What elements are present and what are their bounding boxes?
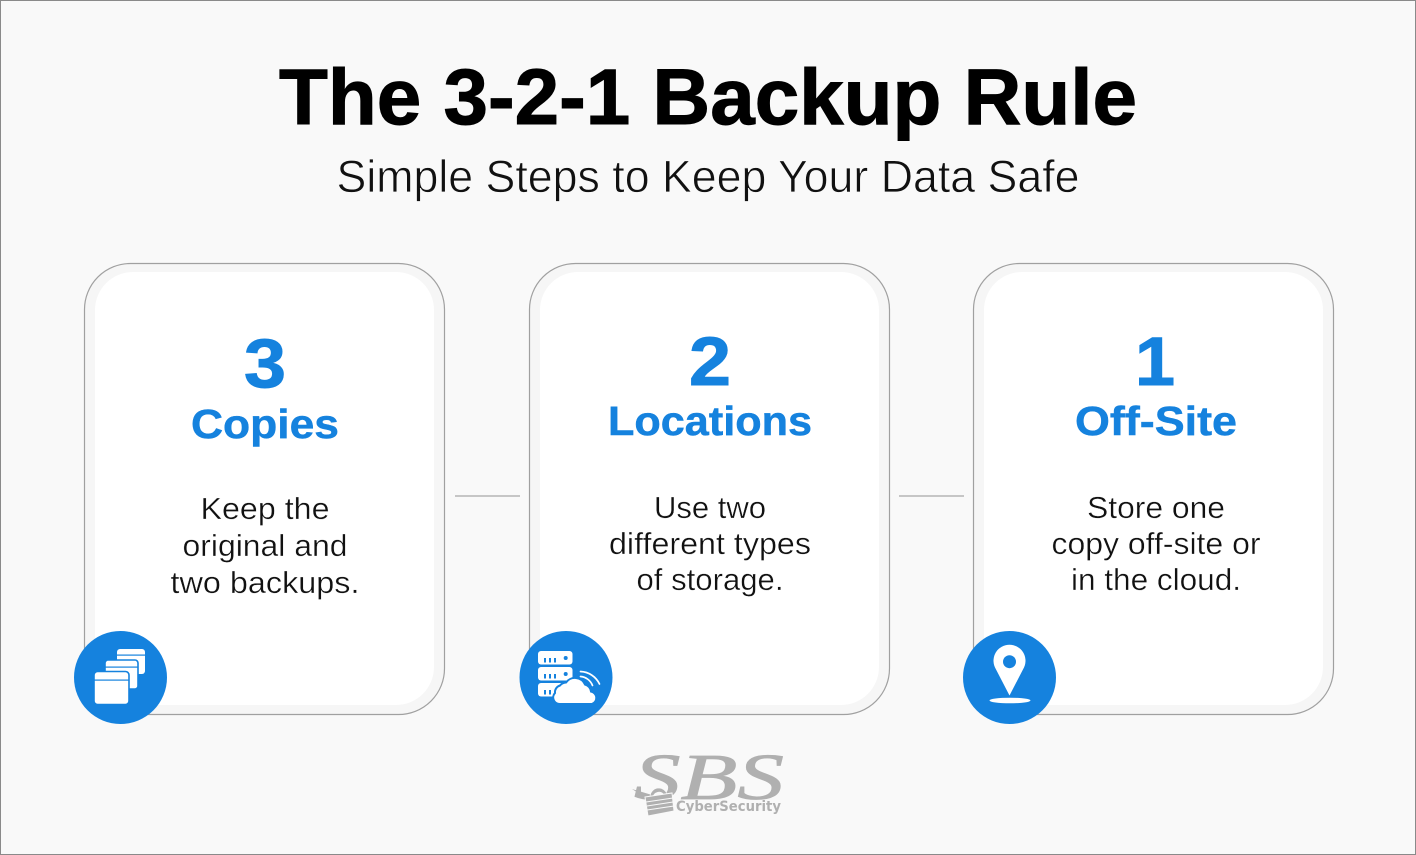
icon: location pin [963,631,1056,724]
logo: SBS CyberSecurity [632,741,784,816]
number 2: 2 [689,323,731,400]
description: copies: Keep the [200,491,330,526]
logo: SBS CyberSecurity: SBS [634,741,784,814]
description: copies: two backups. [170,565,360,600]
description: copies: original and [182,528,348,563]
connector: copies to locations [455,495,520,497]
panel: 3 copies [84,264,444,714]
description: copies [170,491,360,600]
number 3: 3 [244,325,286,402]
panel: 1 off-site [974,264,1334,714]
description: off-site: copy off-site or [1052,526,1260,561]
connector: locations to off-site [899,495,964,497]
description: off-site: in the cloud. [1071,562,1241,597]
panel: 2 locations [530,264,890,714]
subtitle: Simple Steps to Keep Your Data Safe [336,151,1080,202]
description: locations [609,490,811,597]
description: locations: Use two [654,490,766,525]
heading: locations: Locations [608,398,812,444]
heading: copies: Copies [191,401,339,447]
heading: off-site: Off-Site [1075,398,1237,444]
icon: servers and cloud [520,631,612,724]
number 1: 1 [1135,323,1175,400]
description: locations: of storage. [636,562,784,597]
logo: SBS CyberSecurity: CyberSecurity [676,799,781,815]
description: locations: different types [609,526,811,561]
title: The 3-2-1 Backup Rule [279,52,1137,141]
description: off-site: Store one [1087,490,1225,525]
description: off-site [1052,490,1260,597]
icon: stacked copies [74,631,167,724]
